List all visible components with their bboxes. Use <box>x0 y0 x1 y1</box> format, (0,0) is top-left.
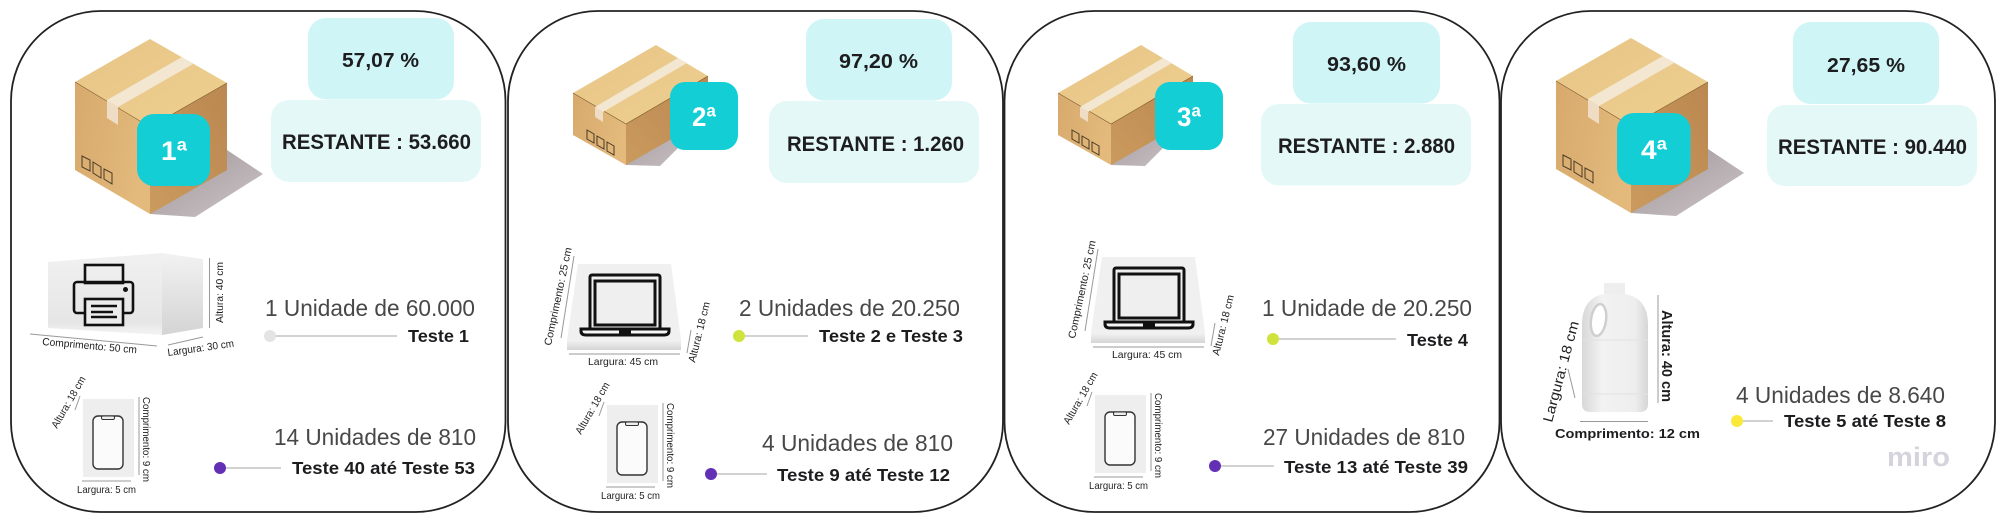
product: jug: Largura: 18 cm <box>1539 319 1582 424</box>
product: printer carton: Largura: 30 cm <box>167 338 235 359</box>
icon: cardboard box 4 <box>1556 38 1744 216</box>
product: phone carton: Largura: 5 cm <box>77 484 136 496</box>
legend: 4 units: Teste 5 até Teste 8 <box>1784 411 1946 431</box>
watermark: miro: miro <box>1887 442 1950 472</box>
badge: 2nd <box>670 82 738 150</box>
legend: 2 units: Teste 2 e Teste 3 <box>819 326 963 346</box>
product: phone carton <box>49 374 152 496</box>
product: phone carton: Largura: 5 cm <box>601 490 660 502</box>
legend: 4 units <box>1731 382 1946 431</box>
product: phone carton: Largura: 5 cm <box>1089 480 1148 492</box>
product: phone carton <box>1061 370 1164 492</box>
panel: 2nd box <box>508 11 1003 512</box>
legend: 1 unit <box>264 295 475 346</box>
legend: 14 units: Teste 40 até Teste 53 <box>292 458 475 478</box>
legend: 14 units <box>214 424 476 478</box>
product: jug: Comprimento: 12 cm <box>1555 426 1700 441</box>
legend: 4 units: 4 Unidades de 810 <box>762 430 953 456</box>
percentage box <box>806 19 952 100</box>
icon: cardboard box 1 <box>75 39 263 217</box>
product: printer carton: Comprimento: 50 cm <box>42 336 138 356</box>
legend: 2 units <box>733 295 963 346</box>
badge: 1st <box>137 114 210 186</box>
remaining box <box>1261 104 1471 186</box>
legend: 1 unit: 1 Unidade de 60.000 <box>265 295 475 321</box>
panel 1 outline <box>11 11 506 512</box>
product: laptop carton: Altura: 18 cm <box>686 300 713 364</box>
product: laptop carton <box>1066 239 1237 361</box>
legend: 2 units: 2 Unidades de 20.250 <box>739 295 960 321</box>
product: laptop carton: Largura: 45 cm <box>1112 349 1182 361</box>
remaining box <box>1767 105 1977 186</box>
legend: 27 units: 27 Unidades de 810 <box>1263 424 1465 450</box>
legend: 27 units <box>1209 424 1468 477</box>
remaining box <box>271 100 481 182</box>
remaining box: RESTANTE : 90.440 <box>1778 136 1967 159</box>
product: jug <box>1539 283 1700 441</box>
product: phone carton: Altura: 18 cm <box>1061 370 1101 426</box>
product: printer carton: Altura: 40 cm <box>214 262 226 323</box>
product: phone carton: Altura: 18 cm <box>49 374 89 430</box>
icon: cardboard box 2 <box>573 45 708 166</box>
legend: 14 units: 14 Unidades de 810 <box>274 424 476 450</box>
legend: 1 unit: 1 Unidade de 20.250 <box>1262 295 1472 321</box>
panel: 4th box <box>1501 11 1995 512</box>
badge: 1st: 1ª <box>161 136 187 166</box>
badge: 4th: 4ª <box>1641 135 1667 165</box>
product: laptop carton: Comprimento: 25 cm <box>542 246 575 347</box>
product: phone carton: Comprimento: 9 cm <box>664 403 676 488</box>
remaining box: RESTANTE : 1.260 <box>787 133 964 156</box>
panel: 1st box <box>11 11 506 512</box>
panel: 3rd box <box>1004 11 1500 512</box>
badge: 4th <box>1617 113 1690 185</box>
percentage box <box>308 18 454 100</box>
percentage box: 93,60 % <box>1327 54 1406 76</box>
legend: 4 units <box>705 430 953 485</box>
remaining box: RESTANTE : 2.880 <box>1278 135 1455 158</box>
product: laptop carton <box>542 246 713 368</box>
panel 3 outline <box>1004 11 1500 512</box>
remaining box: RESTANTE : 53.660 <box>282 131 471 154</box>
product: printer carton <box>30 253 235 359</box>
percentage box: 27,65 % <box>1827 55 1905 77</box>
product: laptop carton: Comprimento: 25 cm <box>1066 239 1099 340</box>
badge: 3rd: 3ª <box>1177 102 1201 132</box>
legend: 1 unit <box>1262 295 1472 350</box>
legend: 4 units: 4 Unidades de 8.640 <box>1736 382 1945 408</box>
legend: 4 units: Teste 9 até Teste 12 <box>777 465 950 485</box>
product: phone carton: Comprimento: 9 cm <box>1152 393 1164 478</box>
percentage box: 97,20 % <box>839 51 918 73</box>
percentage box: 57,07 % <box>342 50 419 72</box>
badge: 2nd: 2ª <box>692 102 716 132</box>
icon: cardboard box 3 <box>1058 45 1193 166</box>
panel 4 outline <box>1501 11 1995 512</box>
badge: 3rd <box>1155 82 1223 150</box>
product: phone carton: Altura: 18 cm <box>573 380 613 436</box>
product: jug: Altura: 40 cm <box>1658 310 1674 402</box>
product: laptop carton: Largura: 45 cm <box>588 356 658 368</box>
percentage box <box>1293 22 1440 104</box>
legend: 1 unit: Teste 1 <box>408 326 469 346</box>
product: phone carton: Comprimento: 9 cm <box>140 397 152 482</box>
percentage box <box>1793 22 1939 104</box>
remaining box <box>769 101 979 183</box>
product: laptop carton: Altura: 18 cm <box>1210 293 1237 357</box>
panel 2 outline <box>508 11 1003 512</box>
product: phone carton <box>573 380 676 502</box>
legend: 27 units: Teste 13 até Teste 39 <box>1284 457 1468 477</box>
legend: 1 unit: Teste 4 <box>1407 330 1468 350</box>
